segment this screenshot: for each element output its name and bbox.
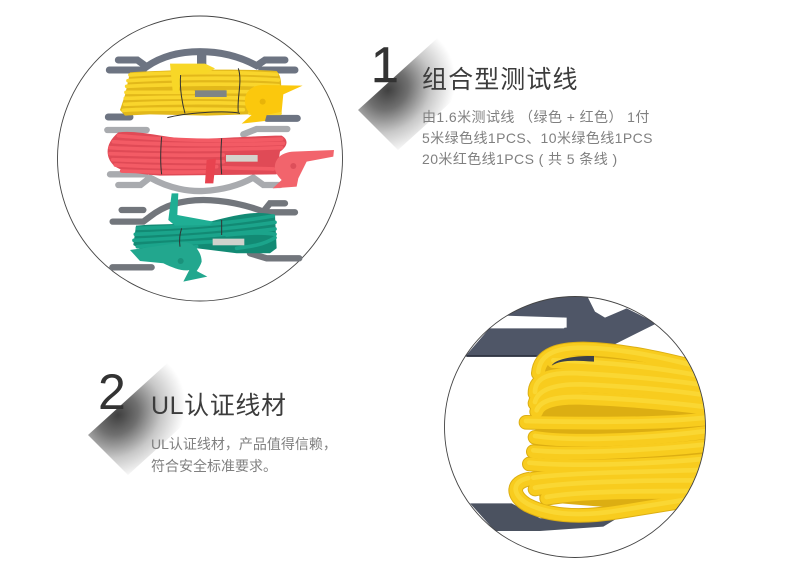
reel arm, lower [470,503,620,531]
description 1: 5米绿色线1PCS、10米绿色线1PCS [422,130,653,146]
yellow cable reel [108,52,303,124]
reel arm, upper [465,295,657,357]
infographic canvas [57,16,706,558]
yellow coil body [516,348,707,515]
diamond accent 2 [88,358,213,475]
number 1: 1 [371,37,399,93]
photo circle: three cable reels [58,16,342,301]
description 2: UL认证线材，产品值得信赖， [151,436,337,452]
photo circle: yellow cable close-up [444,295,707,558]
description 2 [151,436,337,474]
description 1: 由1.6米测试线 （绿色 + 红色） 1付 [422,109,650,125]
diamond accent 1 [358,33,483,150]
description 2: 符合安全标准要求。 [151,458,277,474]
description 1 [422,109,653,167]
red cable reel [107,129,334,191]
heading 1: 组合型测试线 [422,66,579,94]
number 2: 2 [98,364,126,420]
green cable reel [112,193,299,282]
description 1: 20米红色线1PCS ( 共 5 条线 ) [422,151,618,167]
heading 2: UL认证线材 [151,392,287,420]
